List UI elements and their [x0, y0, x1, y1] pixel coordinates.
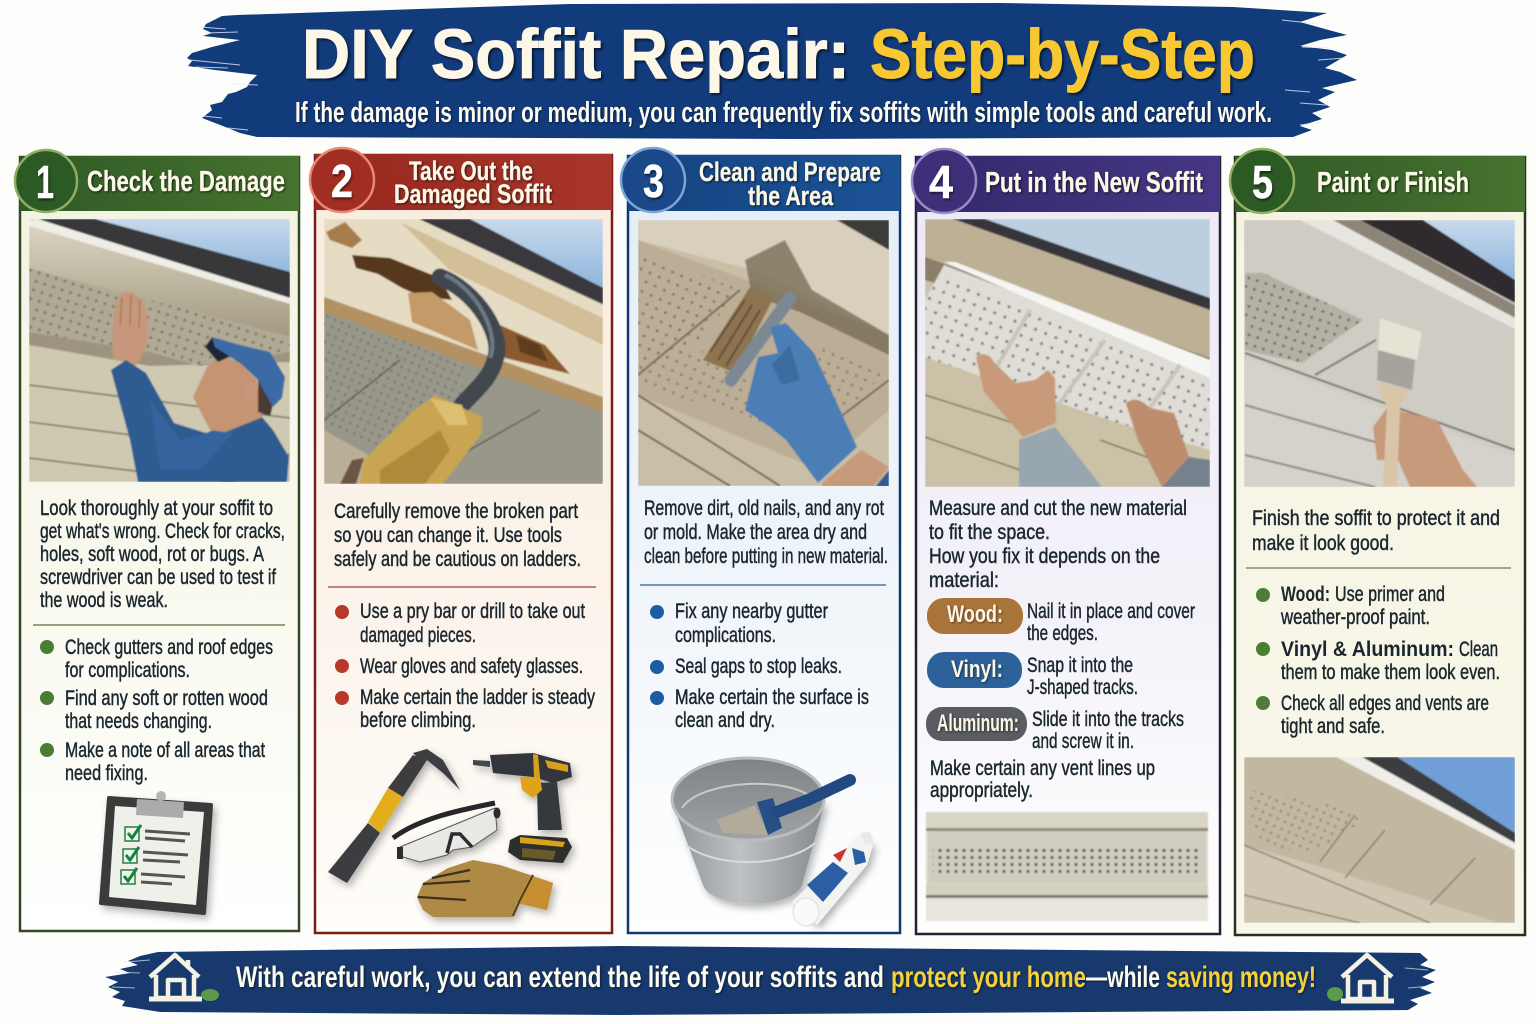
vinyl method: J-shaped tracks. — [1027, 676, 1138, 699]
step 5 header — [1230, 149, 1525, 213]
step 2 body text — [334, 500, 581, 571]
step 1 body text: the wood is weak. — [40, 589, 168, 612]
footer message: protect your home — [891, 961, 1086, 994]
panel: step 3 clean and prepare the area — [621, 148, 900, 933]
aluminum method: Aluminum: — [937, 710, 1019, 737]
step 5 header: 5 — [1252, 156, 1273, 208]
icon: caulk tube — [792, 832, 874, 926]
footer message: saving money! — [1166, 961, 1316, 994]
footer message: With careful work, you can extend the life of your soffits and — [236, 961, 884, 994]
step 3 body text: Remove dirt, old nails, and any rot — [644, 497, 884, 520]
step 5 bullets: tight and safe. — [1281, 715, 1385, 738]
title banner — [187, 3, 1357, 139]
step 5 bullets: weather-proof paint. — [1280, 606, 1430, 629]
step 4 header — [912, 149, 1220, 213]
step 1 bullets: Find any soft or rotten wood — [65, 687, 268, 710]
icon: house right — [1327, 955, 1394, 1001]
icon: house left — [149, 955, 219, 1001]
step 4 body text: How you fix it depends on the — [929, 545, 1160, 568]
step 3 body text: or mold. Make the area dry and — [644, 521, 867, 544]
step 3 header: the Area — [748, 181, 834, 211]
icon: work glove — [417, 860, 553, 917]
step 2 body text: safely and be cautious on ladders. — [334, 548, 581, 571]
step 3 body text: clean before putting in new material. — [644, 545, 888, 568]
photo: hands installing new soffit — [925, 219, 1210, 487]
step 5 bullets: Use primer and — [1335, 583, 1445, 606]
step 4 body text: material: — [929, 569, 999, 592]
step 1 header — [15, 150, 299, 212]
aluminum method: and screw it in. — [1032, 730, 1134, 753]
photo: finished soffit — [1244, 757, 1515, 923]
step 5 header: Paint or Finish — [1317, 167, 1469, 199]
step 4 closing note — [930, 757, 1155, 802]
title text: Step-by-Step — [870, 15, 1255, 93]
step 4 header: Put in the New Soffit — [985, 167, 1203, 199]
step 1 bullets: Make a note of all areas that — [65, 739, 265, 762]
step 3 body text — [644, 497, 888, 568]
icon: metal bucket with brush — [672, 758, 850, 904]
step 3 header: 3 — [643, 155, 664, 207]
step 1 bullets: that needs changing. — [65, 710, 212, 733]
step 2 header: Damaged Soffit — [394, 179, 552, 209]
vinyl method — [927, 652, 1138, 699]
footer banner — [105, 946, 1436, 1015]
photo: painting the soffit — [1244, 220, 1515, 487]
photo: pry bar on rotted wood — [324, 219, 603, 484]
aluminum method: Slide it into the tracks — [1032, 708, 1184, 731]
step 3 bullets: Make certain the surface is — [675, 686, 869, 709]
title text: DIY Soffit Repair: — [302, 15, 850, 93]
step 2 bullets: Use a pry bar or drill to take out — [360, 600, 585, 623]
step 4 body text — [929, 497, 1187, 592]
step 3 bullets: Seal gaps to stop leaks. — [675, 655, 842, 678]
icon: pry bar — [328, 749, 460, 883]
step 2 header: 2 — [331, 155, 353, 207]
step 1 bullets: Check gutters and roof edges — [65, 636, 273, 659]
title text — [302, 15, 1255, 93]
step 3 bullets: clean and dry. — [675, 709, 775, 732]
icon: cordless drill — [473, 753, 572, 863]
photo: man inspecting soffit — [29, 219, 290, 490]
step 1 body text — [40, 497, 285, 612]
step 5 bullets: Vinyl & Aluminum: — [1281, 638, 1454, 661]
step 1 bullets — [40, 636, 273, 785]
step 3 bullets: Fix any nearby gutter — [675, 600, 828, 623]
step 1 header: Check the Damage — [87, 166, 285, 198]
step 2 bullets: damaged pieces. — [360, 624, 476, 647]
step 5 bullets — [1256, 583, 1500, 738]
step 1 body text: holes, soft wood, rot or bugs. A — [40, 543, 264, 566]
step 1 body text: Look thoroughly at your soffit to — [40, 497, 273, 520]
step 5 body text — [1252, 507, 1500, 555]
step 2 body text: so you can change it. Use tools — [334, 524, 562, 547]
step 4 closing note: Make certain any vent lines up — [930, 757, 1155, 780]
wood method: Nail it in place and cover — [1027, 600, 1195, 623]
step 5 body text: Finish the soffit to protect it and — [1252, 507, 1500, 530]
vinyl method: Snap it into the — [1027, 654, 1133, 677]
step 4 body text: to fit the space. — [929, 521, 1050, 544]
icon: safety glasses — [393, 803, 500, 862]
step 3 bullets: complications. — [675, 624, 776, 647]
footer message: —while — [1086, 961, 1160, 994]
step 2 bullets: Wear gloves and safety glasses. — [360, 655, 583, 678]
panel: step 1 check the damage — [15, 150, 299, 931]
step 2 header: Take Out the — [409, 156, 533, 186]
wood method: Wood: — [947, 601, 1003, 628]
step 2 body text: Carefully remove the broken part — [334, 500, 578, 523]
step 4 header: 4 — [929, 156, 953, 208]
step 5 body text: make it look good. — [1252, 532, 1394, 555]
photo: vented soffit panel — [926, 812, 1208, 921]
step 2 bullets — [335, 600, 595, 732]
step 1 bullets: for complications. — [65, 659, 190, 682]
wood method: the edges. — [1027, 622, 1098, 645]
panel: step 5 paint or finish — [1230, 149, 1525, 935]
step 5 bullets: Clean — [1459, 638, 1498, 661]
step 3 header: Clean and Prepare — [699, 157, 881, 187]
step 1 body text: get what's wrong. Check for cracks, — [40, 520, 285, 543]
panel: step 2 take out the damaged soffit — [310, 148, 612, 933]
step 4 closing note: appropriately. — [930, 779, 1033, 802]
step 1 bullets: need fixing. — [65, 762, 148, 785]
step 3 bullets — [650, 600, 869, 732]
vinyl method: Vinyl: — [951, 656, 1003, 683]
step 4 body text: Measure and cut the new material — [929, 497, 1187, 520]
step 1 body text: screwdriver can be used to test if — [40, 566, 276, 589]
step 2 bullets: before climbing. — [360, 709, 476, 732]
step 3 header — [621, 148, 900, 212]
wood method — [927, 598, 1195, 645]
step 1 header: 1 — [36, 156, 54, 208]
step 5 bullets: Wood: — [1281, 583, 1330, 606]
icon: clipboard checklist — [101, 791, 211, 913]
aluminum method — [926, 707, 1184, 753]
step 2 header — [310, 148, 612, 212]
photo: scrubbing soffit with brush — [638, 220, 889, 487]
step 2 bullets: Make certain the ladder is steady — [360, 686, 595, 709]
panel: step 4 put in the new soffit — [912, 149, 1220, 934]
